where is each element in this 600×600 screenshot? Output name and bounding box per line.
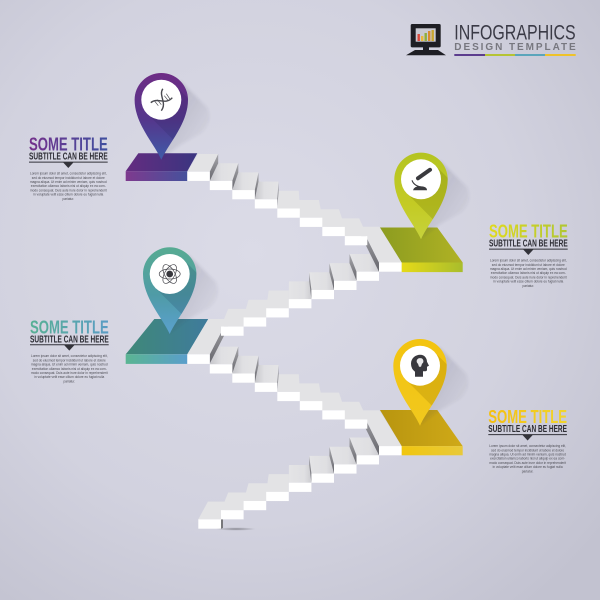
header logo bbox=[406, 21, 576, 56]
yellow body text: in voluptate velit esse cillum dolore eu fugiat nulla bbox=[493, 465, 563, 469]
pin: green with microscope icon bbox=[394, 152, 468, 239]
staircase flight 1: upper descending bbox=[210, 163, 367, 245]
green divider with marker bbox=[489, 249, 568, 255]
green body text: sed do eiusmod tempor incididunt ut labore et dolore bbox=[492, 263, 565, 267]
purple subtitle: SUBTITLE CAN BE HERE bbox=[29, 152, 108, 163]
icon: microscope bbox=[412, 170, 430, 190]
yellow body text: Lorem ipsum dolor sit amet, consectetur adipiscing elit, bbox=[489, 444, 566, 448]
yellow body text: magna aliqua. Ut enim ad minim veniam, quis nostrud bbox=[489, 452, 566, 456]
teal body text: in voluptate velit esse cillum dolore eu fugiat nulla bbox=[34, 375, 105, 379]
yellow divider with marker bbox=[488, 434, 567, 440]
logo colour bar bbox=[454, 54, 576, 56]
teal body text: exercitation ullamco laboris nisi ut aliquip ex ea com- bbox=[32, 367, 107, 371]
purple body text: exercitation ullamco laboris nisi ut aliquip ex ea com- bbox=[31, 184, 106, 188]
green body text bbox=[490, 259, 567, 288]
yellow body text: modo consequat. Duis aute irure dolor in reprehenderit bbox=[489, 461, 567, 465]
purple body text bbox=[30, 172, 107, 201]
green body text: in voluptate velit esse cillum dolore eu fugiat nulla bbox=[493, 280, 564, 284]
green body text: modo consequat. Duis aute irure dolor in reprehenderit bbox=[490, 275, 567, 279]
text block: yellow bbox=[488, 406, 567, 473]
text block: purple bbox=[29, 134, 108, 201]
text block: green bbox=[489, 221, 568, 288]
teal body text: Lorem ipsum dolor sit amet, consectetur adipiscing elit, bbox=[31, 354, 108, 358]
yellow platform bbox=[361, 410, 463, 455]
teal divider with marker bbox=[30, 344, 109, 351]
pin: purple with DNA icon bbox=[134, 73, 208, 160]
icon: head with light bulb bbox=[411, 355, 429, 377]
text block: teal bbox=[30, 316, 109, 383]
purple body text: magna aliqua. Ut enim ad minim veniam, quis nostrud bbox=[30, 180, 107, 184]
purple body text: modo consequat. Duis aute irure dolor in reprehenderit bbox=[30, 188, 107, 192]
green title: SOME TITLE bbox=[489, 221, 568, 242]
teal body text: magna aliqua. Ut enim ad minim veniam, quis nostrud bbox=[31, 363, 108, 367]
teal subtitle: SUBTITLE CAN BE HERE bbox=[30, 334, 109, 345]
icon: DNA bbox=[151, 89, 172, 111]
teal body text: pariatur. bbox=[63, 379, 75, 383]
purple divider with marker bbox=[29, 162, 108, 168]
staircase flight 2: upper ascending bbox=[221, 254, 379, 336]
green body text: Lorem ipsum dolor sit amet, consectetur adipiscing elit, bbox=[490, 259, 567, 263]
green body text: magna aliqua. Ut enim ad minim veniam, quis nostrud bbox=[490, 267, 567, 271]
teal title: SOME TITLE bbox=[30, 316, 109, 337]
staircase flight 3: lower descending bbox=[210, 347, 367, 429]
purple body text: in voluptate velit esse cillum dolore eu fugiat nulla bbox=[33, 193, 104, 197]
icon: atom bbox=[159, 262, 180, 286]
purple body text: Lorem ipsum dolor sit amet, consectetur adipiscing elit, bbox=[30, 172, 107, 176]
staircase flight 4: bottom ascending bbox=[198, 438, 379, 531]
purple body text: pariatur. bbox=[62, 197, 74, 201]
teal body text bbox=[31, 354, 108, 383]
yellow title: SOME TITLE bbox=[488, 406, 567, 427]
yellow body text bbox=[489, 444, 567, 473]
icon: computer monitor with chart bbox=[406, 24, 446, 55]
yellow body text: pariatur. bbox=[522, 469, 533, 473]
yellow body text: exercitation ullamco laboris nisi ut aliquip ex ea com- bbox=[490, 457, 566, 461]
purple title: SOME TITLE bbox=[29, 134, 108, 155]
logo subtitle: DESIGN TEMPLATE bbox=[454, 42, 576, 53]
purple body text: sed do eiusmod tempor incididunt ut labore et dolore bbox=[32, 176, 105, 180]
purple platform bbox=[126, 153, 218, 181]
teal body text: modo consequat. Duis aute irure dolor in reprehenderit bbox=[31, 371, 108, 375]
green platform bbox=[361, 227, 463, 272]
green body text: exercitation ullamco laboris nisi ut aliquip ex ea com- bbox=[491, 271, 566, 275]
pin: yellow with head icon bbox=[393, 339, 468, 426]
green body text: pariatur. bbox=[522, 284, 534, 288]
teal body text: sed do eiusmod tempor incididunt ut labore et dolore bbox=[33, 358, 106, 362]
pin: teal with atom icon bbox=[143, 247, 218, 334]
yellow body text: sed do eiusmod tempor incididunt ut labore et dolore bbox=[491, 448, 564, 452]
teal platform bbox=[126, 319, 228, 364]
